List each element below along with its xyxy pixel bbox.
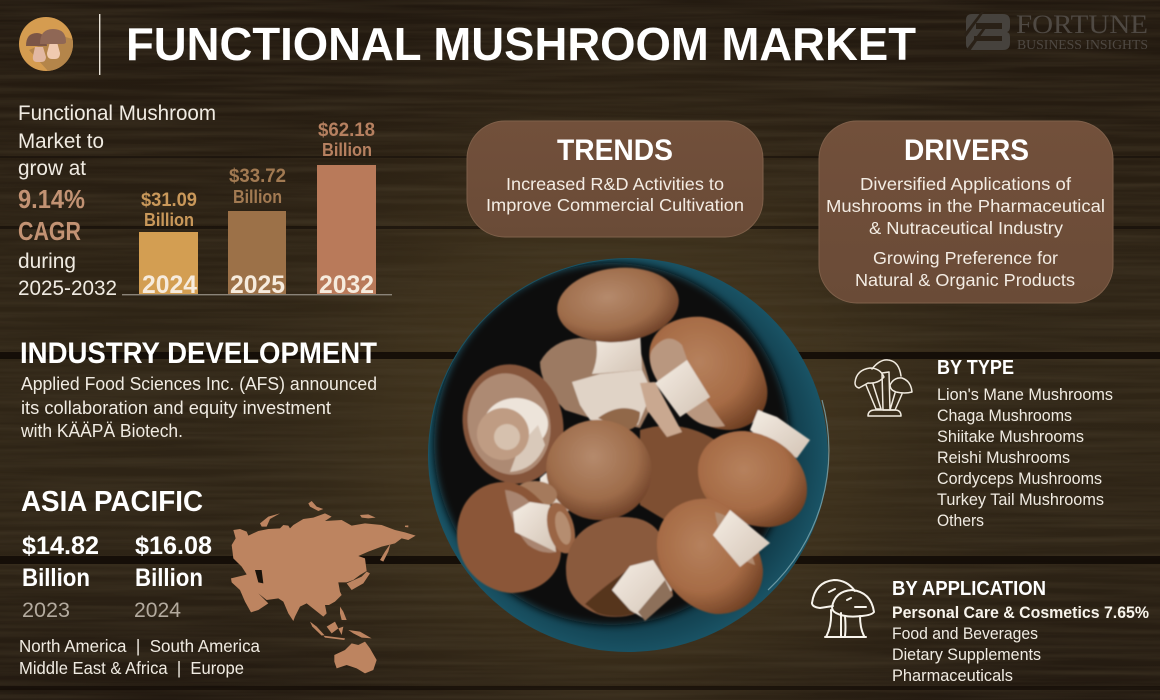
icon: header mushroom badge [19, 17, 73, 71]
text block: by type: Others [937, 511, 984, 530]
mushroom: behind centre [640, 426, 720, 520]
bar: 2032: 2032 [319, 271, 374, 299]
text block: by application [892, 578, 1149, 685]
bar chart: market size [122, 120, 392, 299]
text block: Asia Pacific: $14.82 [22, 532, 99, 560]
bar: 2024 [139, 190, 198, 299]
text block: other regions: North America | South America [19, 636, 260, 656]
text block: CAGR summary: CAGR [18, 216, 81, 246]
bar: 2024: 2024 [142, 271, 197, 299]
text block: Asia Pacific: Billion [22, 564, 90, 592]
panel: drivers: & Nutraceutical Industry [869, 218, 1063, 238]
divider: header rule [99, 14, 100, 75]
logo: Fortune Business Insights: BUSINESS INSIGHTS [1017, 37, 1148, 52]
text block: Asia Pacific: Billion [135, 564, 203, 592]
text block: by type: Lion's Mane Mushrooms [937, 385, 1113, 404]
panel: trends: Increased R&D Activities to [506, 174, 724, 194]
text block: industry development [20, 337, 377, 441]
bar: 2024: $31.09 [141, 190, 197, 211]
mushroom: bottom left [457, 481, 580, 593]
text block: CAGR summary: Market to [18, 130, 104, 153]
icon: by application mushrooms [812, 580, 874, 637]
text block: CAGR summary: 9.14% [18, 184, 85, 214]
bar: 2032: $62.18 [318, 120, 375, 141]
panel: drivers: Mushrooms in the Pharmaceutical [826, 196, 1105, 216]
text block: CAGR summary: during [18, 250, 76, 273]
text block: industry development: Applied Food Sciences Inc. (AFS) announced [21, 374, 377, 394]
mushroom: top [553, 262, 683, 374]
text block: CAGR summary: grow at [18, 157, 86, 180]
illustration: bowl of mushrooms [428, 258, 829, 652]
bar: 2025: $33.72 [229, 166, 286, 187]
text block: other regions [19, 636, 260, 678]
title: FUNCTIONAL MUSHROOM MARKET [126, 18, 916, 70]
text block: CAGR summary: Functional Mushroom [18, 102, 216, 125]
bar: 2025 [228, 166, 286, 299]
panel: trends: TRENDS [557, 134, 673, 167]
text block: Asia Pacific [21, 486, 212, 622]
panel: drivers: DRIVERS [904, 134, 1029, 167]
bar: 2032 [317, 120, 376, 299]
text block: industry development: INDUSTRY DEVELOPMENT [20, 337, 377, 370]
mushroom: left, stem end facing [452, 355, 574, 493]
mushroom: bottom middle [566, 517, 673, 621]
text block: Asia Pacific: ASIA PACIFIC [21, 486, 203, 518]
text block: Asia Pacific: $16.08 [135, 532, 212, 560]
panel: trends: Improve Commercial Cultivation [486, 195, 744, 215]
mushroom: upper right, gills showing [640, 317, 767, 437]
mushroom: bottom right [657, 499, 770, 614]
text block: Asia Pacific: 2023 [22, 599, 70, 622]
text block: by type: Chaga Mushrooms [937, 406, 1072, 425]
text block: by application: Dietary Supplements [892, 645, 1041, 664]
mushroom: behind upper left, gills showing [540, 338, 655, 430]
text block: CAGR summary [18, 102, 216, 300]
text block: by application: Pharmaceuticals [892, 666, 1013, 685]
text block: by type: Shiitake Mushrooms [937, 427, 1084, 446]
text block: by type: Reishi Mushrooms [937, 448, 1070, 467]
panel: drivers: Natural & Organic Products [855, 270, 1075, 290]
text block: by application: Food and Beverages [892, 624, 1038, 643]
text block: by type: Turkey Tail Mushrooms [937, 490, 1104, 509]
bar: 2032: Billion [322, 140, 372, 160]
bar: 2024: Billion [144, 210, 194, 230]
text block: by type: Cordyceps Mushrooms [937, 469, 1102, 488]
text block: by application: Personal Care & Cosmetics 7.65% [892, 603, 1149, 622]
text block: industry development: with KÄÄPÄ Biotech. [20, 421, 183, 441]
text block: Asia Pacific: 2024 [134, 599, 181, 622]
mushroom: right [698, 410, 810, 527]
panel: trends [467, 121, 763, 237]
icon: by type mushrooms [855, 360, 912, 416]
logo: Fortune Business Insights [964, 10, 1148, 52]
bar: 2025: Billion [233, 187, 282, 207]
panel: drivers: Diversified Applications of [860, 174, 1071, 194]
panel: drivers: Growing Preference for [873, 248, 1058, 268]
text block: by application: BY APPLICATION [892, 578, 1046, 600]
text block: by type: BY TYPE [937, 357, 1014, 379]
text block: CAGR summary: 2025-2032 [18, 277, 117, 300]
panel: drivers [819, 121, 1113, 303]
map: Asia Pacific [231, 501, 416, 673]
text block: by type [937, 357, 1113, 530]
text block: industry development: its collaboration and equity investment [21, 398, 331, 418]
bar: 2025: 2025 [230, 271, 285, 299]
mushroom: centre [537, 410, 661, 530]
text block: other regions: Middle East & Africa | Europe [19, 658, 244, 678]
logo: Fortune Business Insights: FORTUNE [1016, 10, 1148, 39]
